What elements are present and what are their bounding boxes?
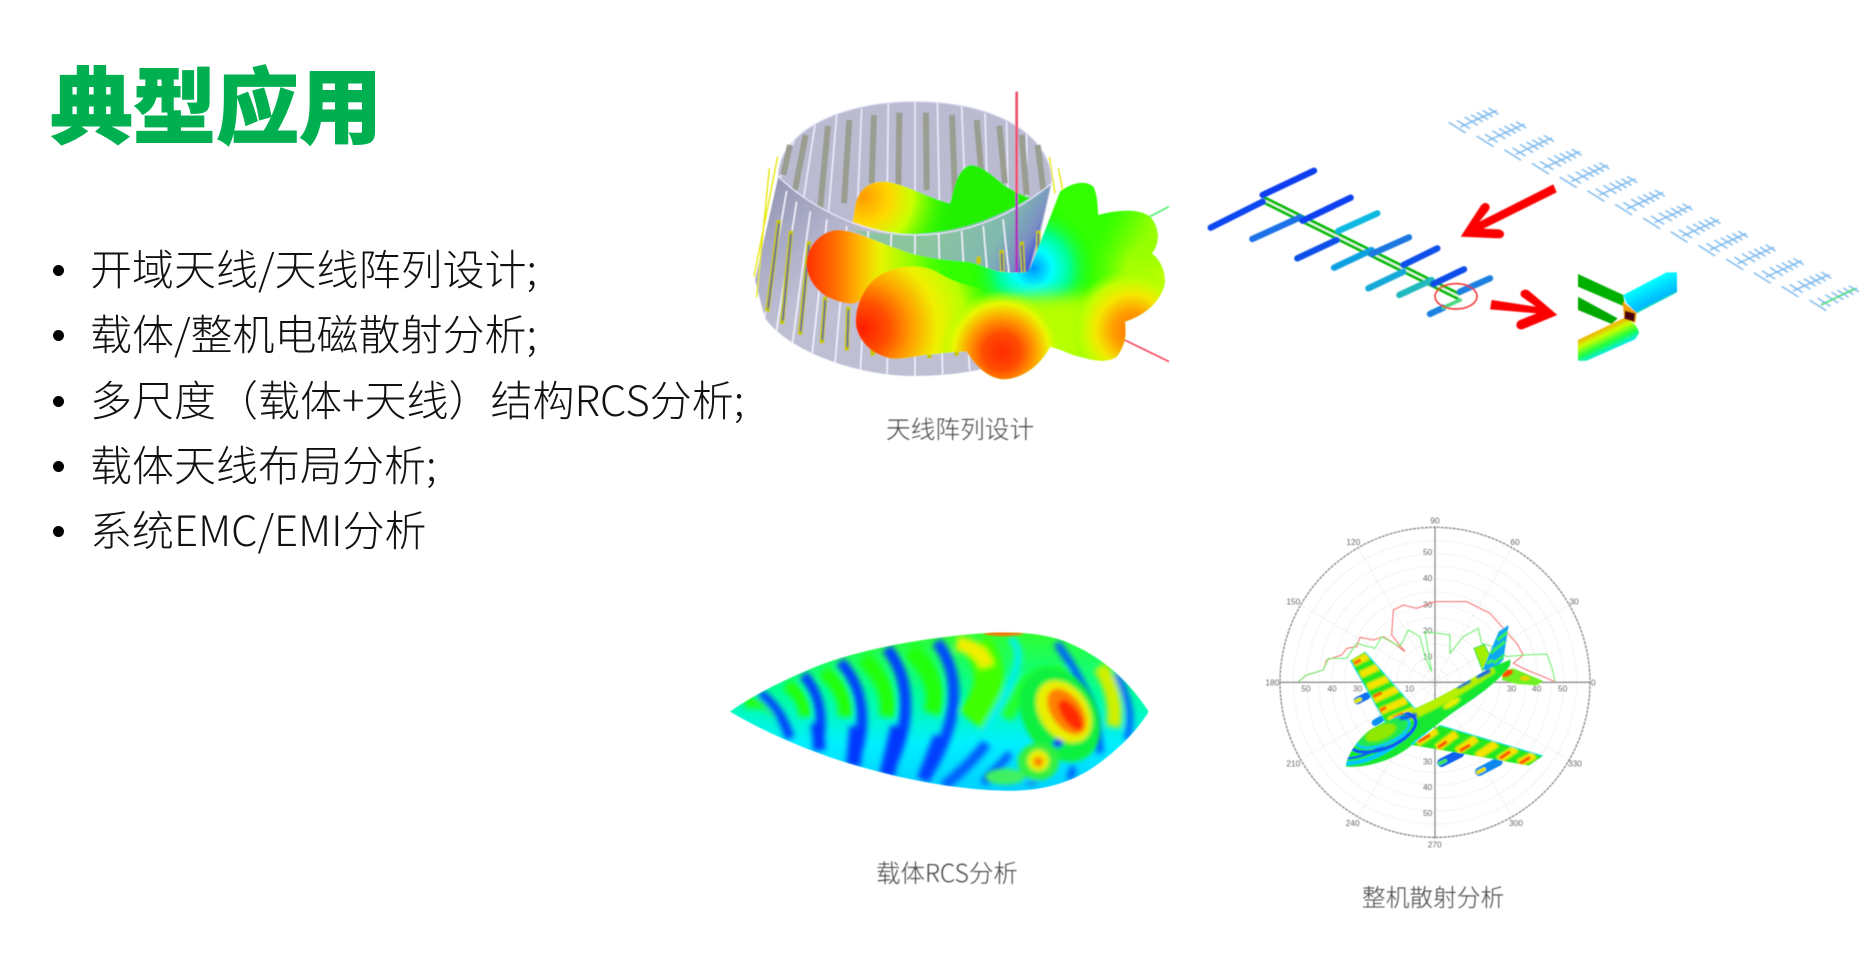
polar angle and radius labels: 30	[1423, 756, 1433, 766]
green scattering curve	[1298, 628, 1555, 682]
polar angle and radius labels: 20	[1423, 625, 1433, 635]
polar angle and radius labels: 30	[1507, 683, 1517, 693]
bullet item 3: 多尺度（载体+天线）结构RCS分析;	[90, 368, 744, 429]
teardrop surface with field bands	[727, 629, 1153, 793]
figure: aircraft scattering polar plot	[1265, 515, 1596, 850]
caption: antenna array design: 天线阵列设计	[886, 410, 1034, 446]
figure: Yagi antenna with current distribution	[1211, 171, 1677, 361]
z-axis line	[1013, 92, 1021, 200]
engines	[1356, 696, 1498, 772]
vertical tail fin	[1482, 624, 1510, 671]
bullet item 1: 开域天线/天线阵列设计;	[90, 237, 537, 298]
cylinder back wall	[778, 102, 1052, 235]
cylinder front wall	[755, 177, 1052, 376]
polar angle and radius labels: 10	[1423, 651, 1433, 661]
polar angle and radius labels: 300	[1509, 818, 1523, 828]
polar angle and radius labels: 0	[1591, 678, 1596, 688]
bullet item 2: 载体/整机电磁散射分析;	[90, 302, 537, 363]
polar angle and radius labels: 60	[1510, 537, 1520, 547]
polar axes	[1280, 526, 1590, 839]
dipole elements	[1211, 171, 1490, 314]
polar angle and radius labels: 150	[1286, 596, 1301, 606]
polar angle and radius labels: 30	[1423, 600, 1433, 610]
aircraft model	[1343, 623, 1547, 772]
polar angle and radius labels: 330	[1568, 759, 1582, 769]
detail inset: feed point close-up	[1578, 272, 1677, 361]
polar grid	[1293, 541, 1577, 824]
polar angle and radius labels: 40	[1423, 782, 1433, 792]
bullet list: typical applications	[53, 237, 744, 559]
polar angle and radius labels: 50	[1301, 683, 1311, 693]
horizontal tail left	[1474, 645, 1491, 671]
arrow: pointing to detail inset	[1490, 290, 1557, 329]
caption: carrier RCS analysis: 载体RCS分析	[876, 855, 1018, 890]
red circle marking feed point	[1435, 284, 1477, 309]
polar angle and radius labels: 40	[1423, 573, 1433, 583]
polar angle and radius labels: 90	[1430, 515, 1440, 525]
polar angle and radius labels: 30	[1569, 596, 1579, 606]
figure: small antenna array row	[1449, 108, 1858, 310]
polar angle and radius labels: 40	[1532, 683, 1542, 693]
polar angle and radius labels: 40	[1327, 683, 1337, 693]
arrow: pointing to enlarged antenna	[1461, 184, 1557, 238]
figure: antenna array design (cylinder with radiation pattern)	[754, 92, 1170, 383]
caption: aircraft scattering analysis: 整机散射分析	[1362, 879, 1504, 913]
polar angle and radius labels: 50	[1423, 808, 1433, 818]
red scattering curve	[1298, 602, 1555, 682]
front radiation lobes	[800, 173, 1170, 383]
polar angle and radius labels: 210	[1286, 759, 1301, 769]
lower wing	[1410, 723, 1547, 768]
polar angle and radius labels: 240	[1346, 818, 1360, 828]
polar angle and radius labels: 270	[1428, 840, 1442, 850]
z-axis lower section	[1013, 193, 1021, 273]
polar angle and radius labels: 50	[1423, 547, 1433, 557]
enlarged Yagi antenna	[1211, 171, 1490, 314]
polar angle and radius labels: 30	[1353, 683, 1363, 693]
x-axis and y-axis lines	[1123, 207, 1169, 362]
twin feed line	[1263, 199, 1459, 297]
fuselage	[1343, 657, 1513, 770]
horizontal tail right	[1502, 668, 1543, 685]
yellow antenna slots	[754, 157, 1064, 358]
polar angle and radius labels: 120	[1346, 537, 1361, 547]
polar angle and radius labels: 180	[1265, 678, 1280, 688]
bullet item 4: 载体天线布局分析;	[90, 433, 437, 494]
upper wing	[1349, 651, 1416, 723]
bullet item 5: 系统EMC/EMI分析	[90, 498, 427, 559]
polar angle and radius labels	[1265, 515, 1596, 850]
polar angle and radius labels: 10	[1405, 683, 1414, 693]
figure: carrier RCS surface current	[727, 629, 1153, 793]
polar outer ring	[1280, 527, 1590, 837]
back radiation lobes	[852, 164, 1030, 235]
title: 典型应用	[50, 41, 382, 161]
polar angle and radius labels: 50	[1558, 683, 1568, 693]
